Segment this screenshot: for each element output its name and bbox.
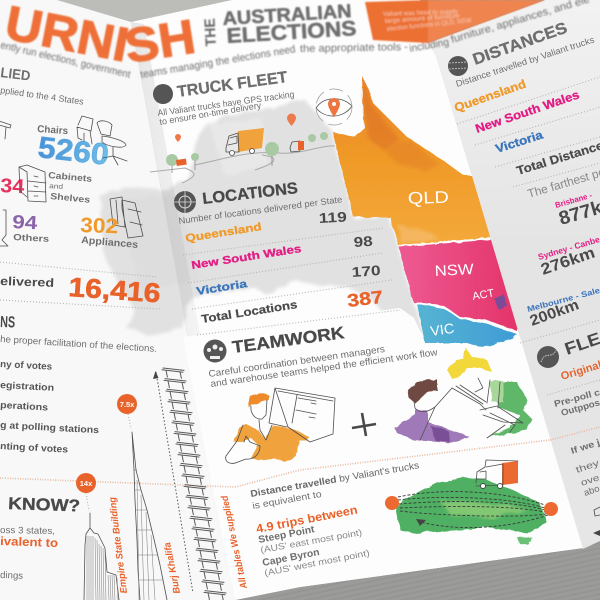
distances: New South Wales: New South Wales <box>473 87 581 136</box>
buildings text: dings <box>0 570 24 582</box>
orange intro box: Valiant was hired to supply <box>383 8 459 18</box>
did you know text: oss 3 states, <box>0 525 55 537</box>
distance equivalence text <box>250 460 420 578</box>
icon: cabinet <box>19 165 46 202</box>
list of election operations <box>0 359 99 456</box>
illustration: Burj Khalifa <box>132 432 167 600</box>
note text lines: abo <box>582 483 600 498</box>
locations: Queensland: Queensland <box>185 221 263 245</box>
cabinets count: 34 <box>0 175 26 198</box>
distance equivalence text: 4.9 trips between <box>255 503 359 536</box>
map: Queensland state: QLD <box>407 188 449 208</box>
others count: 94 <box>12 212 38 234</box>
list of election operations: nting of votes <box>0 441 68 456</box>
orange intro box: election functions in QLD, NSW <box>386 17 473 33</box>
distances icon <box>448 56 468 76</box>
label: All tables We supplied: All tables We supplied <box>219 494 250 591</box>
supplied subtitle: pplied to the 4 States <box>0 85 85 107</box>
tower height marker: 7.5x: 7.5x <box>120 400 135 409</box>
map: Victoria state: VIC <box>429 320 455 339</box>
orange intro box <box>365 0 545 43</box>
teamwork description: Careful coordination between managers <box>208 344 386 380</box>
locations: New South Wales: New South Wales <box>191 243 302 272</box>
label: Empire State Building: Empire State Building <box>107 496 130 594</box>
chairs count: 5260 <box>36 131 110 172</box>
distance equivalence text: (AUS' west most point) <box>263 548 370 578</box>
teamwork description line 2: and warehouse teams helped the efficient work flow <box>210 347 438 390</box>
total delivered label: elivered <box>0 274 54 290</box>
icon: appliances <box>110 197 143 238</box>
icon: arrow fragment <box>593 530 600 536</box>
chart: trips across green Australia map <box>385 460 558 545</box>
panel: left brochure page <box>0 64 235 600</box>
locations icon <box>174 191 196 213</box>
intro sentence middle: teams managing the elections need <box>140 43 296 81</box>
icon: eye with location pin <box>316 89 352 125</box>
locations count: Queensland: 119 <box>318 209 347 226</box>
intro word: including <box>408 36 450 55</box>
grey watercolor map of Australia <box>100 100 425 347</box>
map: New South Wales state <box>399 224 532 331</box>
distance equivalence text: Steep Point <box>257 524 316 546</box>
locations subtitle: Number of locations delivered per State <box>178 194 343 226</box>
teamwork icon <box>204 340 226 362</box>
title: elections: ELECTIONS <box>226 17 357 48</box>
title: the: THE <box>202 18 220 47</box>
orange intro box: large amount of furniture <box>385 13 460 25</box>
flexibility heading: FLE <box>562 329 600 359</box>
locations count: New South Wales: 98 <box>353 233 373 250</box>
appliances count: 302 <box>80 214 119 238</box>
label: Burj Khalifa: Burj Khalifa <box>162 541 183 595</box>
truck fleet heading: TRUCK FLEET <box>176 69 289 101</box>
locations: total: Total Locations <box>201 299 298 326</box>
truck fleet description line 2: to ensure on-time delivery <box>159 100 262 127</box>
flexibility icon <box>537 346 559 368</box>
heading: did you know: KNOW? <box>8 494 80 516</box>
intro sentence left: ently run elections, government <box>0 39 132 81</box>
locations: Victoria: Victoria <box>196 278 249 298</box>
icon: table <box>0 121 11 139</box>
panel: right brochure page <box>428 0 600 549</box>
intro sentence continuation: the appropriate tools - <box>300 41 409 55</box>
route: Melbourne - Sale: Melbourne - Sale <box>526 286 600 314</box>
route: Brisbane: Brisbane - <box>554 191 593 210</box>
distance: 276km: 276km <box>539 244 597 279</box>
title: australian: AUSTRALIAN <box>222 1 352 30</box>
equivalent to highlight: ivalent to <box>0 534 58 550</box>
distance equivalence text: Distance travelled by Valiant's trucks <box>250 460 420 500</box>
flexibility: pre-poll: Pre-poll c <box>553 387 600 409</box>
shelves label: Shelves <box>50 191 91 205</box>
icon: chairs <box>77 116 127 165</box>
operations intro: he proper facilitation of the elections. <box>0 334 157 355</box>
title: furnish right part: SH <box>121 11 199 74</box>
list of election operations: egistration <box>0 380 55 394</box>
map: Queensland state <box>333 76 528 245</box>
appliances label: Appliances <box>81 235 139 251</box>
flexibility: outposts: Outppos <box>560 397 600 418</box>
truck fleet description: All Valiant trucks have GPS tracking <box>157 89 295 118</box>
note text lines: they <box>574 457 600 475</box>
tower height marker: 7.5x <box>117 394 137 429</box>
illustration: Empire State Building <box>84 513 119 600</box>
map: New South Wales state: NSW <box>434 261 475 280</box>
tower height marker: 14x: 14x <box>80 479 93 488</box>
teamwork heading: TEAMWORK <box>231 323 346 357</box>
map: Victoria state <box>417 304 517 348</box>
list of election operations: perations <box>0 400 48 414</box>
heading: operations: NS <box>0 314 16 332</box>
arrow: height of stacked tables <box>153 371 193 593</box>
heading: supplied: LIED <box>0 64 31 84</box>
total delivered count: 16,416 <box>68 272 161 308</box>
white panel behind teamwork and lower section <box>183 308 583 600</box>
truck fleet icon <box>153 84 173 104</box>
illustration: road with trucks <box>150 114 335 183</box>
distance equivalence text: Cape Byron <box>261 547 321 569</box>
map: New South Wales state: ACT <box>471 287 495 303</box>
route: Sydney - Canberra: Sydney - Canbe <box>537 234 600 262</box>
chairs label: Chairs <box>37 124 69 137</box>
icon: plus sign <box>352 413 376 436</box>
others label: Others <box>13 232 49 244</box>
note text lines: ove <box>579 472 600 488</box>
list of election operations: ny of votes <box>0 359 52 373</box>
illustration: delivery man with box <box>226 388 335 463</box>
cabinets label: Cabinets <box>48 170 93 184</box>
note text lines <box>574 457 600 498</box>
distances: total: Total Distance <box>515 138 600 178</box>
distance: 200km: 200km <box>528 296 581 330</box>
illustration: colleagues reading a document <box>393 348 533 443</box>
distances: Queensland: Queensland <box>452 77 528 115</box>
and label: and <box>49 183 63 191</box>
list of election operations: g at polling stations <box>0 420 99 436</box>
note: if we: If we j <box>570 437 600 456</box>
distance equivalence text: is equivalent to <box>252 489 322 512</box>
panel: middle brochure page <box>150 69 558 591</box>
icon: box fragment <box>594 507 600 516</box>
locations heading: LOCATIONS <box>202 180 299 208</box>
distances: Victoria: Victoria <box>494 128 545 156</box>
page header <box>0 0 591 81</box>
distances heading: DISTANCES <box>471 20 570 69</box>
distance equivalence text: (AUS' east most point) <box>260 527 363 555</box>
distances subtitle: Distance travelled by Valiant trucks <box>455 34 596 89</box>
tower height marker: 14x <box>76 473 96 511</box>
locations count: total: 387 <box>346 287 384 311</box>
locations count: Victoria: 170 <box>351 262 381 280</box>
top table surface <box>40 0 240 24</box>
icon: lamp <box>0 210 8 246</box>
illustration: stack of tables <box>162 368 226 600</box>
